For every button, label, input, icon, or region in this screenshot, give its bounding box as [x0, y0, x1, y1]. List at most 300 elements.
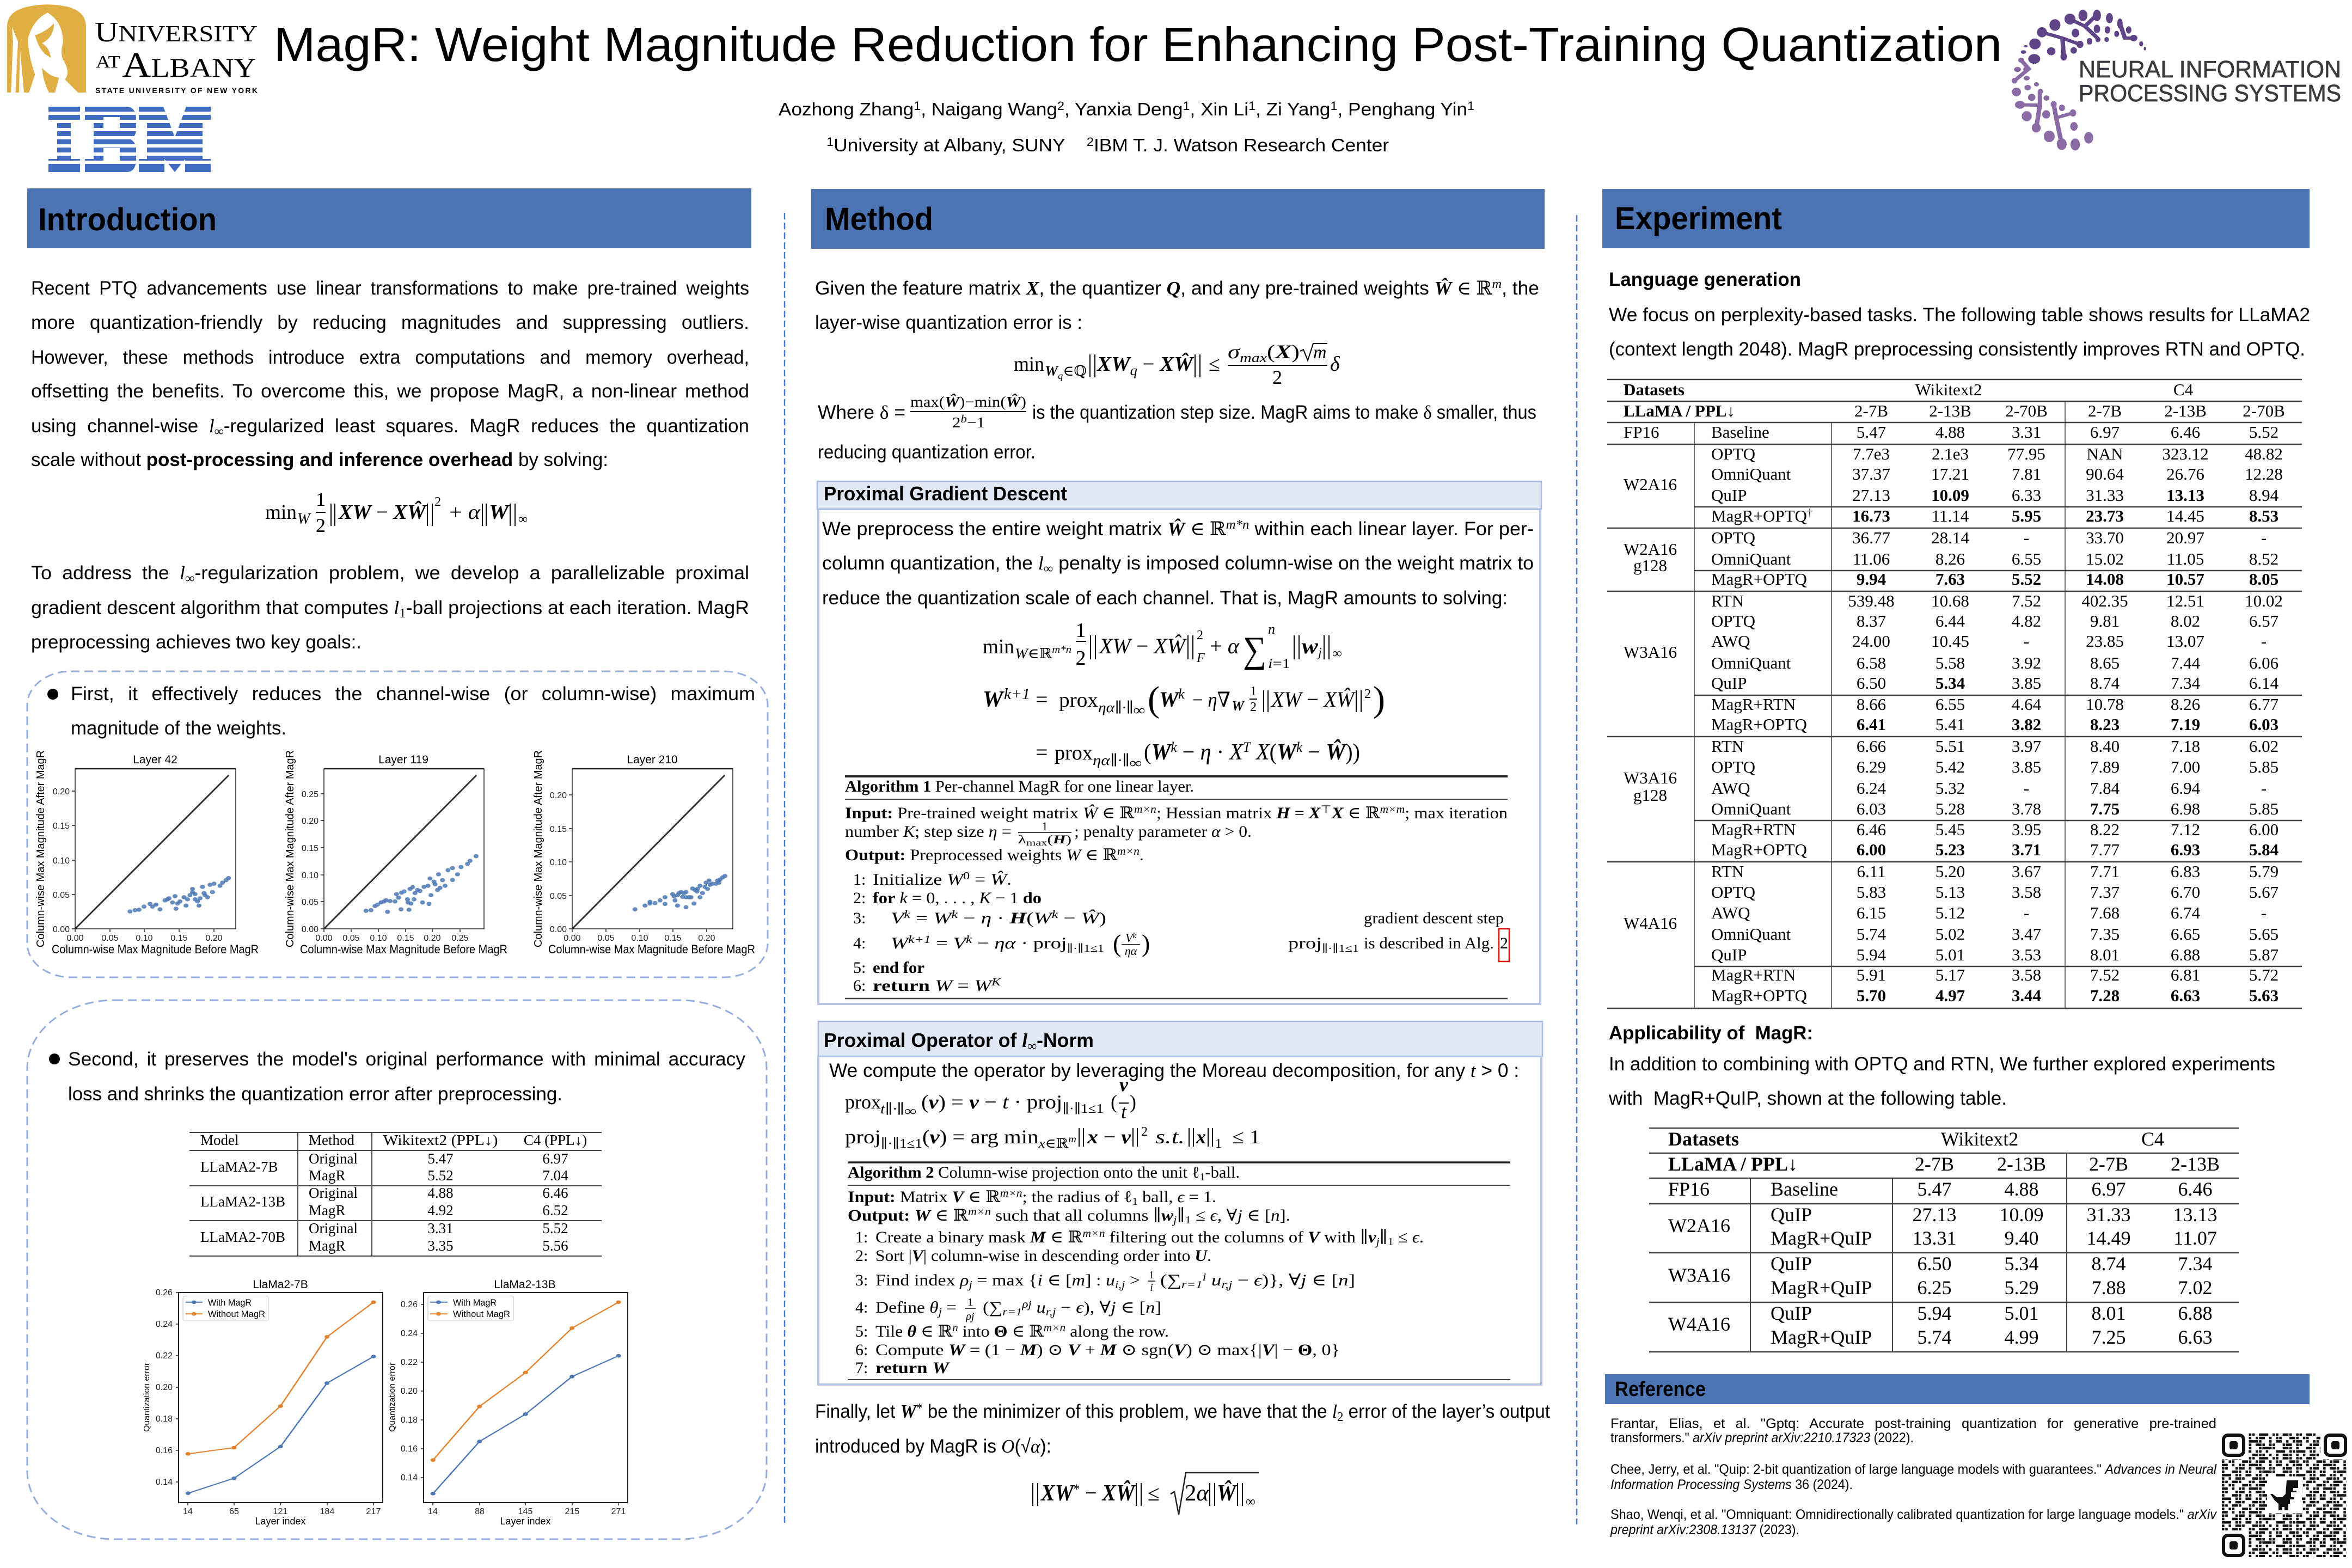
formula: closed-form update: k: [1296, 739, 1303, 755]
formula: final bound: XW: [1040, 1481, 1075, 1506]
algorithm 2: ball,: [1138, 1188, 1178, 1206]
subheading: applicability: Applicability of MagR:: [1609, 1022, 1813, 1044]
icon: QR code: [2220, 1432, 2349, 1558]
formula: projection: v) = arg min: [930, 1126, 1027, 1148]
algorithm 2: 3:: [855, 1271, 868, 1289]
table: PPL results: 10.78: [2086, 695, 2124, 714]
table: PPL results: 4.82: [2012, 611, 2041, 630]
table: PPL results: 20.97: [2166, 528, 2204, 547]
table: PPL results: MagR+OPTQ: [1711, 986, 1807, 1005]
algorithm 2: Tile θ ∈ ℝ: [875, 1322, 950, 1340]
formula: column-wise objective: W∈ℝ: [1015, 646, 1050, 661]
formula: projection: x − v: [1087, 1126, 1131, 1148]
algorithm 2: 1: [1185, 1214, 1191, 1226]
text block: step size explanation: reducing quantization error.: [818, 442, 1036, 463]
algorithm 1: ∥·∥1≤1: [1322, 943, 1359, 954]
scatter chart: Layer 42: 0.10: [136, 934, 153, 943]
algorithm 1: 1: [1042, 819, 1048, 833]
table: accuracy comparison: 3.31: [427, 1220, 454, 1236]
table: PPL results: 3.58: [2012, 965, 2041, 984]
table: MagR+QuIP results: Baseline: [1771, 1178, 1838, 1200]
table: PPL results: 5.13: [1935, 883, 1965, 902]
table: PPL results: 5.23: [1935, 840, 1965, 859]
table: PPL results: 6.57: [2249, 611, 2278, 630]
table: MagR+QuIP results: 31.33: [2086, 1204, 2131, 1226]
scatter chart: Layer 119: Column-wise Max Magnitude After MagR: [284, 750, 296, 947]
table: PPL results: 3.47: [2012, 924, 2041, 944]
algorithm 2: ; the radius of ℓ: [1022, 1188, 1132, 1206]
algorithm 2: m×n: [1044, 1322, 1065, 1334]
algorithm 1: −: [958, 909, 981, 927]
line chart: LlaMa2-7B: 65: [229, 1507, 239, 1516]
algorithm 2: 1: [1132, 1196, 1138, 1208]
table: PPL results: AWQ: [1711, 632, 1750, 651]
table: PPL results: 5.58: [1935, 653, 1965, 672]
algorithm 1: max: [1026, 838, 1048, 848]
table: PPL results: 24.00: [1852, 632, 1890, 651]
formula: quantization error bound: q: [1058, 370, 1063, 381]
table: PPL results: 15.02: [2086, 549, 2124, 568]
logo: IBM: [46, 107, 213, 172]
table: MagR+QuIP results: 11.07: [2173, 1227, 2217, 1249]
table: accuracy comparison: [189, 1132, 602, 1256]
table: MagR+QuIP results: 2-7B: [1915, 1153, 1954, 1175]
table: PPL results: 6.00: [2249, 820, 2278, 839]
table: accuracy comparison: 5.52: [427, 1167, 454, 1184]
authors: 1: [914, 99, 921, 113]
algorithm 1: k: [951, 909, 959, 921]
line chart: LlaMa2-7B: Quantization error: [142, 1363, 151, 1432]
table: PPL results: 8.53: [2249, 506, 2278, 525]
logo: Neural Information Processing Systems: [2012, 10, 2341, 150]
table: PPL results: 16.73: [1852, 506, 1890, 525]
table: PPL results: 5.79: [2249, 862, 2278, 881]
algorithm 2: Input: Matrix V ∈ ℝ: [848, 1188, 997, 1206]
algorithm 2: 4:: [855, 1298, 868, 1316]
table: MagR+QuIP results: 10.09: [1999, 1204, 2044, 1226]
table: MagR+QuIP results: 5.29: [2005, 1277, 2038, 1298]
formula: proximal update: [983, 679, 1385, 719]
table: PPL results: 5.94: [1857, 945, 1886, 964]
table: PPL results: 5.51: [1935, 737, 1965, 756]
table: PPL results: 5.67: [2249, 883, 2278, 902]
table: PPL results: 3.82: [2012, 715, 2041, 734]
table: PPL results: 6.74: [2171, 903, 2201, 922]
table: accuracy comparison: Original: [309, 1185, 358, 1201]
line chart: LlaMa2-7B: 217: [366, 1507, 381, 1516]
table: PPL results: 27.13: [1852, 486, 1890, 505]
table: PPL results: MagR+RTN: [1711, 965, 1796, 984]
table: PPL results: 6.94: [2171, 779, 2201, 798]
table: PPL results: 3.92: [2012, 653, 2041, 672]
table: MagR+QuIP results: 9.40: [2005, 1227, 2038, 1249]
table: MagR+QuIP results: W3A16: [1668, 1264, 1730, 1286]
formula: MagR objective: [265, 488, 528, 536]
line chart: LlaMa2-13B: 0.18: [401, 1416, 418, 1425]
authors: , Penghang Yin: [1338, 99, 1467, 119]
table: PPL results: W4A16: [1624, 914, 1677, 933]
table: accuracy comparison: 5.47: [427, 1150, 454, 1167]
panel header: Proximal Gradient Descent: [824, 482, 1067, 505]
scatter chart: Layer 42: 0.00: [66, 934, 84, 943]
scatter chart: Layer 210: [532, 750, 755, 956]
table: MagR+QuIP results: MagR+QuIP: [1771, 1227, 1872, 1249]
line chart: LlaMa2-13B: Quantization error: [388, 1363, 397, 1432]
formula: proximal update: − η∇: [1192, 689, 1230, 712]
table: PPL results: 6.70: [2171, 883, 2200, 902]
scatter chart: Layer 119: 0.25: [451, 934, 469, 943]
authors: 1: [1330, 99, 1338, 113]
text block: references: Information Processing Systems 36 (2024).: [1610, 1477, 1853, 1492]
algorithm 2: Find index ρ: [875, 1271, 968, 1289]
table: PPL results: [1607, 379, 2302, 1008]
table: MagR+QuIP results: 13.31: [1912, 1227, 1957, 1249]
algorithm 2: r=1: [1002, 1306, 1022, 1318]
algorithm 1: proj: [1288, 934, 1314, 952]
line chart: LlaMa2-13B: 0.20: [401, 1387, 418, 1396]
algorithm 1: Algorithm 1 Per-channel MagR for one linear layer.: [845, 777, 1194, 795]
formula: MagR objective: + α: [449, 501, 481, 524]
table: PPL results: 7.19: [2171, 715, 2200, 734]
table: PPL results: 5.28: [1935, 799, 1965, 818]
text: second goal: Second, it preserves the model's original performance with minimal accuracy: [68, 1049, 745, 1070]
algorithm 1: ): [1142, 929, 1150, 957]
table: PPL results: 6.88: [2171, 945, 2200, 964]
scatter chart: Layer 210: 0.10: [550, 858, 567, 867]
algorithm 1: X: [1331, 804, 1344, 822]
algorithm 2: = max {: [972, 1271, 1037, 1289]
table: MagR+QuIP results: 5.34: [2005, 1253, 2038, 1275]
algorithm 1: −: [1058, 909, 1081, 927]
formula: MagR objective: ∞: [518, 512, 528, 526]
table: PPL results: 8.23: [2090, 715, 2120, 734]
table: PPL results: 5.65: [2249, 924, 2278, 944]
table: PPL results: 5.85: [2249, 799, 2278, 818]
table: PPL results: 7.44: [2171, 653, 2201, 672]
algorithm 1: end for: [873, 959, 924, 977]
panel header: Proximal Operator of l: [824, 1029, 1027, 1051]
table: PPL results: 37.37: [1852, 464, 1890, 483]
table: PPL results: 3.31: [2012, 422, 2041, 442]
table: PPL results: MagR+OPTQ: [1711, 569, 1807, 589]
formula: closed-form update: prox: [1055, 742, 1093, 764]
table: PPL results: 48.82: [2245, 444, 2283, 463]
table: PPL results: 6.50: [1857, 673, 1886, 693]
algorithm 1: λ: [1018, 832, 1024, 846]
algorithm 2: ϵ), ∀j ∈ [n]: [1076, 1298, 1160, 1316]
algorithm 1: H ): [1053, 832, 1070, 846]
table: PPL results: 14.08: [2086, 569, 2124, 589]
table: PPL results: 323.12: [2162, 444, 2209, 463]
scatter chart: Layer 119: 0.20: [424, 934, 441, 943]
table: PPL results: 6.46: [1857, 820, 1886, 839]
table: PPL results: OmniQuant: [1711, 799, 1791, 818]
scatter chart: Layer 42: 0.15: [53, 822, 70, 831]
formula: proximal update: 2: [1364, 687, 1371, 701]
formula: MagR objective: 2: [434, 495, 441, 509]
table: PPL results: MagR+RTN: [1711, 820, 1796, 839]
table: PPL results: OmniQuant: [1711, 549, 1791, 568]
text block: error order: error of the layer’s output: [1343, 1401, 1550, 1422]
table: MagR+QuIP results: 6.63: [2178, 1326, 2213, 1348]
callout: reference box: [1499, 929, 1509, 961]
text: first goal: [71, 683, 755, 739]
scatter chart: Layer 210: 0.05: [550, 892, 567, 901]
table: PPL results: 8.65: [2090, 653, 2120, 672]
scatter chart: Layer 42: Column-wise Max Magnitude Before MagR: [52, 942, 259, 956]
algorithm 1: is described in Alg.: [1364, 934, 1494, 952]
authors: , Yanxia Deng: [1064, 99, 1183, 119]
algorithm 2: j: [967, 1279, 972, 1291]
table: PPL results: 6.93: [2171, 840, 2200, 859]
formula: quantization error bound: XW: [1097, 353, 1132, 376]
line chart: LlaMa2-7B: Without MagR: [208, 1309, 265, 1319]
table: PPL results: 7.84: [2090, 779, 2120, 798]
table: PPL results: LLaMA / PPL↓: [1624, 401, 1735, 420]
table: PPL results: RTN: [1711, 862, 1744, 881]
scatter chart: Layer 210: 0.05: [597, 934, 615, 943]
formula: projection: ∥·∥1≤1: [881, 1137, 922, 1151]
text block: method intro: Given the feature matrix X, the quantizer Q, and any pre-trained weights Ŵ ∈ ℝ: [815, 278, 1492, 299]
text block: error order: l: [1332, 1401, 1337, 1422]
heading: Reference: [1605, 1374, 2310, 1404]
formula: projection: ∈ℝ: [1045, 1137, 1069, 1151]
table: PPL results: 8.52: [2249, 549, 2278, 568]
formula: MagR objective: min: [265, 501, 297, 524]
table: PPL results: 5.41: [1935, 715, 1965, 734]
algorithm 2: j: [936, 1306, 942, 1318]
heading: Method: [811, 189, 1545, 249]
scatter chart: Layer 210: 0.10: [631, 934, 648, 943]
text block: applicability: [1608, 1054, 2275, 1109]
text block: step size explanation: is the quantization step size. MagR aims to make δ smaller, thus: [1032, 402, 1536, 423]
formula: MagR objective: W: [489, 501, 510, 524]
formula: projection: 1: [1215, 1137, 1222, 1151]
scatter chart: Layer 42: 0.20: [205, 934, 223, 943]
table: MagR+QuIP results: C4: [2141, 1128, 2164, 1150]
algorithm 2: ρj: [1021, 1298, 1032, 1310]
scatter chart: Layer 42: 0.10: [53, 856, 70, 866]
algorithm 2: ϵ, ∀j ∈ [n].: [1210, 1206, 1289, 1224]
table: PPL results: MagR+OPTQ: [1711, 840, 1807, 859]
scatter chart: Layer 42: 0.05: [53, 891, 70, 900]
table: PPL results: 11.06: [1853, 549, 1890, 568]
scatter chart: Layer 42: 0.20: [53, 787, 70, 797]
table: PPL results: 8.74: [2090, 673, 2120, 693]
text block: step size explanation: Where δ =: [818, 402, 905, 423]
algorithm 1: ∥·∥1≤1: [1067, 943, 1104, 954]
formula: quantization error bound: (: [1267, 341, 1275, 363]
table: PPL results: OmniQuant: [1711, 464, 1791, 483]
table: PPL results: RTN: [1711, 591, 1744, 610]
algorithm 2: i: [1203, 1271, 1206, 1283]
formula: proximal update: ∞: [1134, 702, 1145, 718]
formula: closed-form update: =: [1036, 740, 1048, 764]
authors: 1: [1248, 99, 1255, 113]
algorithm 2: r,j: [1046, 1306, 1056, 1318]
formula: prox operator: v: [1119, 1074, 1129, 1095]
algorithm 1: ηα: [1125, 944, 1137, 958]
table: PPL results: 6.03: [1857, 799, 1886, 818]
table: accuracy comparison: Wikitext2 (PPL↓): [383, 1132, 498, 1148]
algorithm 1: ; penalty parameter α > 0.: [1074, 823, 1252, 841]
table: accuracy comparison: 6.46: [542, 1185, 568, 1201]
table: PPL results: 8.01: [2090, 945, 2120, 964]
formula: column-wise objective: ∞: [1332, 646, 1342, 661]
scatter chart: Layer 119: 0.10: [370, 934, 387, 943]
table: MagR+QuIP results: 2-13B: [1997, 1153, 2046, 1175]
text block: references: Chee, Jerry, et al. "Quip: 2-bit quantization of large language models with guarantees." Advances in Neural: [1610, 1462, 2217, 1477]
table: PPL results: 5.20: [1935, 862, 1965, 881]
table: PPL results: 6.46: [2171, 422, 2200, 442]
table: PPL results: OPTQ: [1711, 528, 1755, 547]
table: PPL results: 3.85: [2012, 673, 2041, 693]
algorithm 1: ⊤: [1321, 804, 1332, 816]
text block: proximal gradient: reduce the quantization scale of each channel. That is, MagR amounts to solving:: [822, 587, 1508, 609]
text: first goal: magnitude of the weights.: [71, 718, 286, 739]
table: PPL results: 33.70: [2086, 528, 2124, 547]
algorithm 1: 4:: [853, 934, 866, 952]
scatter chart: Layer 119: [284, 750, 507, 956]
text block: proximal gradient: m*n: [1226, 518, 1249, 532]
table: PPL results: 23.73: [2086, 506, 2124, 525]
table: PPL results: 6.66: [1857, 737, 1886, 756]
scatter chart: Layer 119: 0.05: [342, 934, 360, 943]
table: PPL results: 5.01: [1935, 945, 1965, 964]
table: PPL results: g128: [1633, 786, 1667, 805]
formula: quantization error bound: X): [1275, 341, 1298, 363]
algorithm 1: 5:: [853, 959, 866, 977]
table: PPL results: OPTQ: [1711, 444, 1755, 463]
table: MagR+QuIP results: QuIP: [1771, 1302, 1812, 1324]
algorithm 2: (∑: [983, 1298, 1000, 1316]
algorithm 1: ∈ ℝ: [1347, 804, 1377, 822]
table: PPL results: 2-7B: [2088, 401, 2122, 420]
text block: proximal gradient: ∞: [1044, 562, 1053, 576]
table: PPL results: 17.21: [1931, 464, 1969, 483]
table: PPL results: -: [2024, 528, 2029, 547]
formula: projection: ≤ 1: [1232, 1126, 1260, 1148]
text block: step size explanation: 2: [952, 414, 959, 431]
text: second goal: loss and shrinks the quantization error after preprocessing.: [68, 1083, 562, 1105]
table: PPL results: 7.81: [2012, 464, 2041, 483]
table: MagR+QuIP results: Wikitext2: [1941, 1128, 2018, 1150]
scatter chart: Layer 119: Layer 119: [378, 754, 428, 766]
text block: intro paragraph: using channel-wise l: [31, 415, 215, 437]
formula: quantization error bound: σ: [1228, 341, 1241, 363]
table: PPL results: OmniQuant: [1711, 924, 1791, 944]
table: accuracy comparison: Original: [309, 1220, 358, 1236]
text block: error order: introduced by MagR is O(√α):: [815, 1436, 1051, 1457]
algorithm 2: u: [1211, 1271, 1221, 1289]
table: MagR+QuIP results: 7.88: [2092, 1277, 2126, 1298]
formula: quantization error bound: min: [1014, 353, 1044, 376]
formula: final bound: ∞: [1246, 1494, 1255, 1509]
formula: closed-form update: η · X: [1200, 740, 1244, 765]
table: PPL results: 14.45: [2166, 506, 2204, 525]
authors: 1: [1183, 99, 1190, 113]
algorithm 2: i: [1150, 1282, 1153, 1294]
table: PPL results: 5.95: [2012, 506, 2041, 525]
formula: column-wise objective: [983, 619, 1342, 671]
table: PPL results: 6.55: [1935, 695, 1965, 714]
table: PPL results: -: [2261, 903, 2267, 922]
table: PPL results: OPTQ: [1711, 757, 1755, 776]
table: accuracy comparison: 4.88: [427, 1185, 454, 1201]
formula: proximal update: W: [983, 687, 1004, 712]
text block: method intro: [815, 277, 1539, 333]
formula: prox operator: prox: [845, 1091, 881, 1113]
table: PPL results: 7.35: [2090, 924, 2120, 944]
text block: proximal paragraph: gradient descent algorithm that computes l: [31, 597, 399, 618]
table: PPL results: 7.28: [2090, 986, 2120, 1005]
logo: University at Albany: UNIVERSITY: [95, 17, 258, 48]
formula: closed-form update: X(W: [1256, 740, 1297, 765]
table: PPL results: W3A16: [1624, 768, 1677, 787]
table: PPL results: QuIP: [1711, 945, 1747, 964]
formula: column-wise objective: min: [983, 635, 1014, 658]
panel: first goal: [27, 671, 768, 977]
scatter chart: Layer 119: 0.20: [302, 817, 318, 826]
formula: final bound: Ŵ: [1217, 1480, 1237, 1506]
scatter chart: Layer 119: 0.25: [302, 790, 318, 799]
algorithm 2: n: [952, 1322, 958, 1334]
text block: intro paragraph: offsetting the benefits. To overcome this, we propose MagR, a non-linear method: [31, 381, 749, 402]
line chart: LlaMa2-7B: 0.22: [156, 1351, 173, 1361]
text block: intro paragraph: Recent PTQ advancements use linear transformations to make pre-trained weights: [31, 278, 749, 299]
table: PPL results: -: [2261, 779, 2267, 798]
table: PPL results: 2.1e3: [1932, 444, 1969, 463]
table: PPL results: 5.17: [1935, 965, 1965, 984]
algorithm 1: m×n: [1117, 846, 1140, 857]
heading: Method: Method: [825, 201, 933, 237]
algorithm 2: [848, 1162, 1510, 1380]
table: PPL results: QuIP: [1711, 673, 1747, 693]
table: PPL results: AWQ: [1711, 779, 1750, 798]
formula: closed-form update: k: [1171, 739, 1177, 755]
table: PPL results: 2-70B: [2005, 401, 2048, 420]
algorithm 2: Sort |V| column-wise in descending order into U.: [875, 1247, 1211, 1265]
algorithm 2: r=1: [1181, 1279, 1203, 1291]
table: MagR+QuIP results: W4A16: [1668, 1313, 1730, 1335]
table: PPL results: 5.45: [1935, 820, 1965, 839]
text: second goal: [68, 1049, 745, 1105]
formula: column-wise objective: + α: [1210, 634, 1240, 658]
table: MagR+QuIP results: 5.47: [1918, 1178, 1951, 1200]
table: accuracy comparison: 7.04: [542, 1167, 568, 1184]
formula: prox operator: ): [1130, 1091, 1136, 1113]
formula: closed-form update: [1036, 739, 1360, 771]
table: accuracy comparison: Model: [200, 1132, 238, 1148]
table: PPL results: 5.32: [1935, 779, 1965, 798]
table: MagR+QuIP results: FP16: [1668, 1178, 1710, 1200]
formula: projection: (: [922, 1126, 930, 1148]
algorithm 2: 1: [1199, 1171, 1205, 1183]
panel: experiment: [1602, 189, 2349, 1558]
scatter chart: Layer 210: 0.00: [564, 934, 581, 943]
algorithm 2: −: [1232, 1271, 1254, 1289]
scatter chart: Layer 42: [35, 750, 259, 956]
scatter chart: Layer 42: 0.00: [53, 925, 70, 934]
table: PPL results: 6.03: [2249, 715, 2278, 734]
algorithm 2: ∥: [1380, 1228, 1388, 1246]
table: PPL results: 6.06: [2249, 653, 2278, 672]
algorithm 2: 5:: [855, 1322, 868, 1340]
table: PPL results: -: [2024, 632, 2029, 651]
algorithm 1: 2:: [853, 889, 866, 907]
formula: final bound: [1033, 1473, 1259, 1515]
table: MagR+QuIP results: 4.99: [2005, 1326, 2038, 1348]
